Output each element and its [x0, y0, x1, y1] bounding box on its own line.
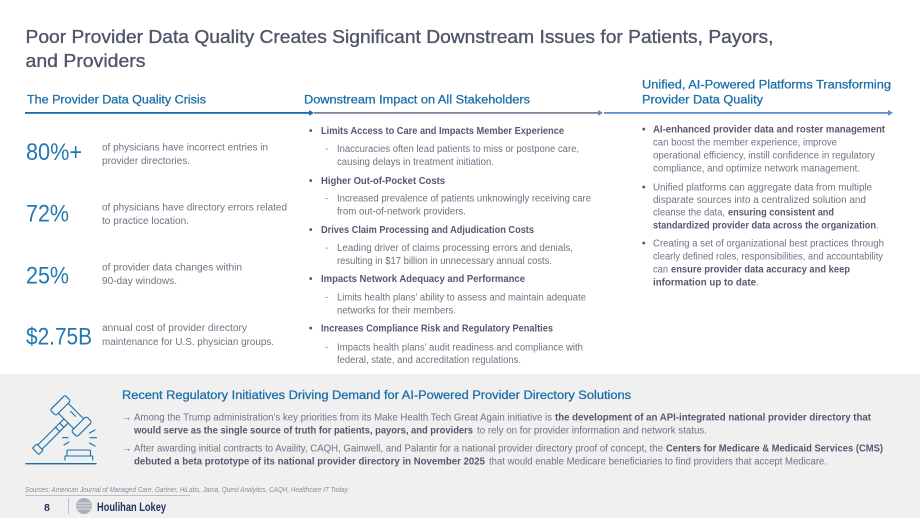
- stat: 80%+: 80%+: [26, 139, 82, 166]
- heading: unified AI-powered platforms: Unified, AI-Powered Platforms Transforming: [642, 77, 891, 91]
- item: AI-enhanced data: AI-enhanced provider data and roster management: [653, 124, 886, 136]
- stat: 80%+: provider directories.: [102, 156, 190, 167]
- item: AI-enhanced data: •: [642, 124, 646, 136]
- title: Poor Provider Data Quality Creates Significant Downstream Issues for Patients, Payors,: [26, 26, 774, 47]
- item: AI-enhanced data: operational efficiency, instill confidence in regulatory: [653, 150, 875, 162]
- stat: 72%: to practice location.: [102, 216, 189, 227]
- heading: downstream impact on all stakeholders: Downstream Impact on All Stakeholders: [304, 92, 530, 106]
- item: AI-enhanced data: can boost the member experience, improve: [653, 138, 837, 148]
- item: network adequacy: -: [325, 292, 328, 304]
- arrow: impact to platforms: [314, 110, 603, 116]
- item: unified platforms: Unified platforms can aggregate data from multiple: [653, 182, 872, 194]
- heading: unified AI-powered platforms: Provider Data Quality: [642, 92, 764, 106]
- sources note: Sources: American Journal of Managed Care, Gartner, HiLabs, Jama, Quest Analytics, CAQH, Healthcare IT Today.: [25, 485, 349, 494]
- bullet: CMS beta prototype: After awarding initial contracts to Availity, CAQH, Gainwell, and Palantir for a national provider directory proof of concept, the: [134, 444, 663, 454]
- item: access to care: causing delays in treatment initiation.: [337, 157, 494, 168]
- item: access to care: Limits Access to Care and Impacts Member Experience: [321, 126, 564, 137]
- item: unified platforms: disparate sources into a centralized solution and: [653, 195, 866, 206]
- bullet: CMS beta prototype: debuted a beta prototype of its national provider directory in November 2025: [134, 456, 485, 468]
- item: best practices: can: [653, 264, 668, 276]
- item: out-of-pocket costs: -: [325, 194, 328, 204]
- bullet: national provider directory: would serve as the single source of truth for patients, payors, and providers: [133, 426, 473, 436]
- heading: unified AI-powered platforms: [642, 77, 891, 106]
- item: best practices: •: [642, 238, 646, 250]
- item: access to care: Inaccuracies often lead patients to miss or postpone care,: [337, 144, 579, 155]
- item: compliance risk: [309, 324, 583, 366]
- item: out-of-pocket costs: [309, 176, 591, 218]
- stat: 80%+: of physicians have incorrect entries in: [102, 142, 268, 154]
- item: out-of-pocket costs: Higher Out-of-Pocket Costs: [321, 176, 445, 187]
- stat: $2.75B: $2.75B: [26, 324, 92, 350]
- bullet: CMS beta prototype: Centers for Medicare & Medicaid Services (CMS): [666, 444, 883, 454]
- stat: 25%: [26, 262, 242, 290]
- title: [26, 26, 774, 71]
- item: claim processing: -: [325, 243, 328, 254]
- item: access to care: -: [325, 144, 328, 155]
- bullet: CMS beta prototype: [122, 444, 883, 468]
- bullet: national provider directory: the development of an API-integrated national provider directory that: [555, 412, 872, 424]
- item: out-of-pocket costs: •: [309, 176, 313, 187]
- item: claim processing: Leading driver of claims processing errors and denials,: [337, 243, 573, 254]
- item: unified platforms: .: [876, 220, 879, 232]
- item: network adequacy: networks for their members.: [337, 306, 456, 316]
- bullet: national provider directory: →: [122, 412, 132, 424]
- bullet: national provider directory: Among the Trump administration’s key priorities from its Make Health Tech Great Again initiative is: [134, 412, 552, 424]
- stat: 72%: of physicians have directory errors related: [102, 202, 287, 214]
- item: claim processing: resulting in $17 billion in unnecessary annual costs.: [337, 256, 552, 267]
- panel: AI-powered platforms list: [642, 124, 886, 288]
- panel: crisis statistics: [26, 139, 287, 350]
- item: network adequacy: Limits health plans’ ability to assess and maintain adequate: [337, 292, 586, 304]
- item: compliance risk: federal, state, and accreditation regulations.: [337, 355, 521, 366]
- item: claim processing: Drives Claim Processing and Adjudication Costs: [321, 225, 534, 236]
- stat: $2.75B: maintenance for U.S. physician groups.: [102, 337, 274, 348]
- item: best practices: [642, 238, 884, 288]
- item: out-of-pocket costs: Increased prevalence of patients unknowingly receiving care: [337, 194, 591, 204]
- page number: 8: [44, 502, 50, 514]
- logo: Houlihan Lokey: [76, 498, 166, 514]
- item: unified platforms: [642, 182, 879, 232]
- stat: 25%: 90-day windows.: [102, 276, 177, 287]
- heading: recent regulatory initiatives: Recent Regulatory Initiatives Driving Demand for AI-Powered Provider Directory Solutions: [122, 388, 631, 402]
- arrow: crisis to impact: [25, 110, 314, 116]
- item: compliance risk: -: [325, 342, 328, 354]
- stat: 72%: 72%: [26, 200, 69, 228]
- item: access to care: [309, 126, 579, 168]
- item: claim processing: [309, 225, 573, 267]
- stat: $2.75B: [26, 323, 274, 350]
- item: compliance risk: •: [309, 324, 313, 334]
- bullet: national provider directory: to rely on for provider information and network status.: [477, 426, 707, 436]
- item: best practices: clearly defined roles, responsibilities, and accountability: [653, 252, 883, 262]
- item: network adequacy: Impacts Network Adequacy and Performance: [321, 274, 525, 285]
- item: network adequacy: [309, 274, 586, 316]
- item: AI-enhanced data: [642, 124, 886, 174]
- item: best practices: information up to date: [653, 278, 756, 288]
- item: unified platforms: •: [642, 182, 646, 194]
- item: unified platforms: standardized provider data across the organization: [653, 220, 876, 232]
- stat: 25%: 25%: [26, 262, 69, 290]
- item: unified platforms: ensuring consistent and: [728, 208, 834, 218]
- bullet: national provider directory: [122, 412, 872, 436]
- icon: gavel: [22, 395, 96, 465]
- item: best practices: Creating a set of organizational best practices through: [653, 238, 884, 250]
- panel: downstream impact list: [309, 126, 591, 366]
- panel: regulatory initiatives band: [0, 374, 920, 518]
- item: claim processing: •: [309, 225, 313, 236]
- heading: the provider data quality crisis: The Provider Data Quality Crisis: [27, 92, 206, 106]
- arrow: platforms: [604, 110, 893, 116]
- item: access to care: •: [309, 126, 313, 137]
- item: best practices: .: [756, 278, 759, 288]
- title: and Providers: [26, 50, 146, 71]
- item: unified platforms: cleanse the data,: [653, 208, 725, 218]
- stat: 72%: [26, 200, 287, 228]
- stat: 80%+: [26, 139, 268, 167]
- stat: $2.75B: annual cost of provider directory: [102, 323, 247, 334]
- stat: 25%: of provider data changes within: [102, 262, 242, 274]
- item: out-of-pocket costs: from out-of-network providers.: [337, 206, 466, 218]
- bullet: CMS beta prototype: →: [122, 444, 132, 454]
- item: compliance risk: Increases Compliance Risk and Regulatory Penalties: [321, 324, 553, 334]
- logo: Houlihan Lokey: Houlihan Lokey: [97, 500, 166, 514]
- bullet: CMS beta prototype: that would enable Medicare beneficiaries to find providers that accept Medicare.: [489, 456, 827, 468]
- item: network adequacy: •: [309, 274, 313, 285]
- item: compliance risk: Impacts health plans’ audit readiness and compliance with: [337, 342, 583, 354]
- item: best practices: ensure provider data accuracy and keep: [671, 264, 850, 276]
- item: AI-enhanced data: compliance, and optimize network management.: [653, 164, 860, 174]
